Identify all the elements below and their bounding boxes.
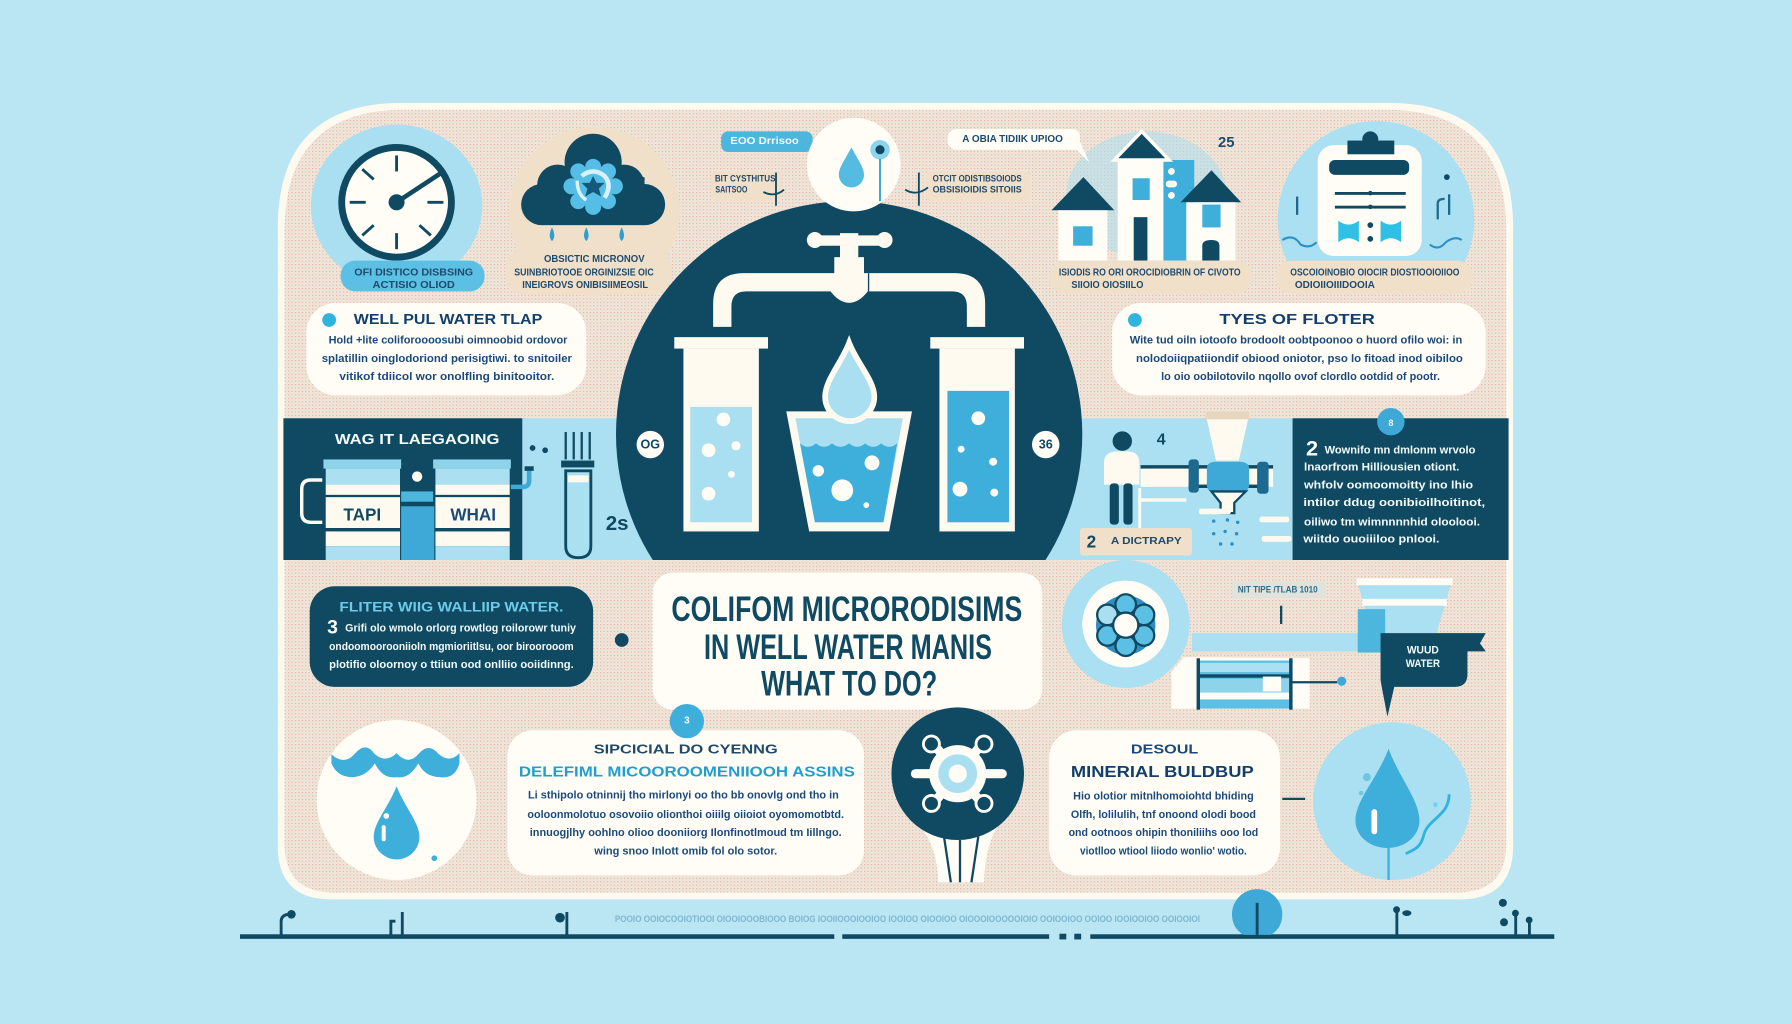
badge: left number <box>637 431 664 458</box>
panel: mineral buildup: DESOUL <box>1131 743 1199 757</box>
tag: dictrapy: A DICTRAPY <box>1111 536 1182 547</box>
panel: beneficial microorganisms: ooloonmolotuo osovoiio olionthoi oiiilg oiioiot oyomomotbtd. <box>527 809 844 821</box>
cloud caption <box>514 254 654 291</box>
panel: mineral buildup: MINERIAL BULDBUP <box>1071 764 1254 781</box>
icon: drop with stem <box>1313 722 1471 880</box>
panel: well pul water tlap: vitikof tdiicol wor onolfling binitooitor. <box>339 371 554 383</box>
banner: wood water: WATER <box>1406 658 1440 670</box>
icon: water drop badge <box>807 118 901 211</box>
banner: wood water: WUUD <box>1407 644 1439 656</box>
infographic canvas <box>240 102 1554 940</box>
callout: top house label: A OBIA TIDIIK UPIOO <box>962 134 1063 145</box>
panel: mineral buildup: Hio olotior mitnlhomoiohtd bhiding <box>1073 791 1254 803</box>
panel: types of filter: Wite tud oiln iotoofo brodoolt oobtpoonoo o huord ofilo woi: in <box>1130 335 1462 347</box>
panel: types of filter <box>1112 303 1486 395</box>
houses caption: SIIOIO OIOSIILO <box>1071 280 1143 291</box>
panel: mineral buildup <box>1049 730 1280 875</box>
houses caption <box>1049 261 1253 294</box>
top label pill: EOO Drrisoo <box>730 136 799 147</box>
panel: dark right text: Wownifo mn dmlonm wrvolo <box>1325 444 1475 456</box>
footer tree <box>1232 889 1282 935</box>
panel: beneficial microorganisms: wing snoo Inlott omib fol olo sotor. <box>593 845 777 857</box>
small caption right of drop <box>926 171 1031 201</box>
label: filter line <box>1232 582 1326 624</box>
panel: dark left tanks <box>283 418 522 560</box>
panel: well pul water tlap: WELL PUL WATER TLAP <box>354 312 542 328</box>
panel: beneficial microorganisms: SIPCICIAL DO CYENNG <box>594 743 778 757</box>
badge: right panel number <box>1377 408 1405 435</box>
title <box>653 573 1042 710</box>
panel: beneficial microorganisms: DELEFIML MICOOROOMENIIOOH ASSINS <box>519 765 855 781</box>
icon: cloud with microbe <box>505 127 680 296</box>
icon: test tube <box>511 432 629 558</box>
icon: faucet <box>713 232 985 327</box>
badge: left number: OG <box>641 438 660 452</box>
panel: dark left tanks: WAG IT LAEGAOING <box>335 432 499 448</box>
panel: well pul water tlap <box>306 303 586 395</box>
panel: types of filter: lo oio oobilotovilo nqollo ovof clordlo ootdid of pootr. <box>1161 371 1440 383</box>
center glass with drop <box>786 343 912 531</box>
small caption right of drop: OTCIT ODISTIBSOIODS <box>933 173 1022 183</box>
tag: dictrapy <box>1080 528 1192 555</box>
right glass <box>930 337 1024 531</box>
small caption left of drop: BIT CYSTHITUS <box>715 173 775 183</box>
small caption right of drop: OBSISIOIDIS SITOIIS <box>933 185 1022 195</box>
icon: filter device <box>1171 657 1346 710</box>
icon: waves and drop <box>317 720 477 880</box>
panel: types of filter: TYES OF FLOTER <box>1219 312 1375 328</box>
panel: dark filter box: Grifi olo wmolo orlorg rowtlog roilorowr tuniy <box>345 623 577 635</box>
antenna lines <box>763 173 928 206</box>
top label pill <box>721 131 813 152</box>
central dark circle <box>616 202 1082 560</box>
panel: dark right text: whfolv oomoomoitty ino lhio <box>1303 480 1473 492</box>
panel: mineral buildup: ond ootnoos ohipin thoniliihs ooo lod <box>1069 827 1258 839</box>
icon: clock <box>311 125 482 287</box>
houses caption: ISIODIS RO ORI OROCIDIOBRIN OF CIVOTO <box>1059 268 1241 279</box>
title: COLIFOM MICRORODISIMS <box>671 589 1022 629</box>
badge: right panel number: 8 <box>1388 418 1393 428</box>
panel: dark right text: 2 <box>1306 436 1318 460</box>
panel: dark right text: wiitdo ouoiiiloo pnlooi. <box>1302 533 1439 545</box>
label: filter line: NIT TIPE /TLAB 1010 <box>1238 585 1318 595</box>
panel: dark left tanks: TAPI <box>343 504 381 524</box>
icon: test tube: 2s <box>606 512 629 535</box>
cloud caption: INEIGROVS ONIBISIIMEOSIL <box>522 280 648 291</box>
panel: well pul water tlap: splatillin oinglodoriond perisigtiwi. to snitoiler <box>322 353 573 365</box>
badge: right number <box>1032 431 1059 458</box>
panel: dark right text <box>1293 418 1509 560</box>
panel: beneficial microorganisms <box>507 730 864 875</box>
title: IN WELL WATER MANIS <box>704 627 992 667</box>
icon: microbe in ring <box>1062 560 1190 688</box>
icon: person and filter pipe: 4 <box>1157 432 1166 448</box>
footer note: POOIO OOIOCOOIOTIOOI OIOOIOOOBIOOO BOIOG IOOIIOOOIOOIOO IOOIOO OIOOIOO OIOOOIOOOOOIOIO OOIOOIOO OOIOO IOOIOOIOO OOIOOIOI <box>615 914 1200 924</box>
middle colour band <box>283 418 1509 560</box>
footer baseline <box>240 934 1554 939</box>
panel: types of filter: nolodoiiqpatiiondif obiood oniotor, pso lo fitoad inod oibiloo <box>1136 353 1463 365</box>
panel: dark filter box <box>310 586 593 687</box>
icon: microbe balloon <box>891 707 1024 882</box>
clipboard caption: OSCOIOINOBIO OIOCIR DIOSTIOOIOIIOO <box>1290 268 1459 279</box>
footer plants right <box>1393 899 1533 935</box>
small caption left of drop: SAITSOO <box>715 185 747 195</box>
main panel <box>278 103 1513 899</box>
panel: mineral buildup: viotlloo wtiool liiodo wonlio' wotio. <box>1080 845 1247 857</box>
panel: dark filter box: FLITER WIIG WALLIIP WATER. <box>339 599 563 614</box>
connector line <box>1282 798 1305 800</box>
clipboard caption: ODIOIIOIIIDOOIA <box>1295 280 1375 291</box>
icon: person and filter pipe <box>1104 411 1291 546</box>
clipboard caption <box>1275 261 1473 294</box>
panel: dark filter box: 3 <box>327 616 338 638</box>
clock caption <box>341 261 485 291</box>
banner: wood water <box>1381 633 1486 717</box>
cloud caption: SUINBRIOTOOE ORGINIZSIE OIC <box>514 268 654 279</box>
panel: dark right text: oiliwo tm wimnnnnhid oloolooi. <box>1304 516 1480 528</box>
panel: dark right text: lnaorfrom Hilliousien otiont. <box>1304 461 1459 473</box>
badge: center panel number: 3 <box>684 716 690 727</box>
number: 25: 25 <box>1218 135 1235 151</box>
badge: right number: 36 <box>1039 438 1053 452</box>
callout: top house label <box>947 129 1089 162</box>
panel: dark left tanks: WHAI <box>450 504 496 524</box>
connector dot <box>615 633 629 647</box>
small caption left of drop <box>711 171 782 201</box>
panel: dark filter box: plotifio oloornoy o ttiiun ood onlliio ooiidinng. <box>329 659 574 671</box>
icon: houses <box>1051 131 1241 261</box>
icon: clipboard <box>1278 121 1474 262</box>
title: WHAT TO DO? <box>761 663 937 703</box>
badge: center panel number <box>670 704 704 738</box>
panel: mineral buildup: Olfh, lolilulih, tnf onoond olodi bood <box>1071 809 1256 821</box>
panel: beneficial microorganisms: innuogjlhy oohlno olioo dooniiorg Ilonfinotlmoud tm Iillngo. <box>530 827 842 839</box>
clock caption: ACTISIO OLIOD <box>373 280 455 291</box>
tag: dictrapy: 2 <box>1087 532 1096 552</box>
icon: pipe and funnel <box>1192 578 1453 655</box>
left glass <box>674 337 768 531</box>
panel: dark filter box: ondoomoorooniioln mgmioriitlsu, oor biroorooom <box>329 641 574 653</box>
footer plants left <box>281 911 567 935</box>
panel: well pul water tlap: Hold +lite coliforoooosubi oimnoobid ordovor <box>329 335 568 347</box>
clock caption: OFI DISTICO DISBSING <box>354 268 473 279</box>
panel: dark right text: intilor ddug oonibioilhoitinot, <box>1303 497 1485 509</box>
cloud caption: OBSICTIC MICRONOV <box>544 254 645 265</box>
panel: beneficial microorganisms: Li sthipolo otninnij tho mirlonyi oo tho bb onovlg ond tho in <box>528 789 839 801</box>
